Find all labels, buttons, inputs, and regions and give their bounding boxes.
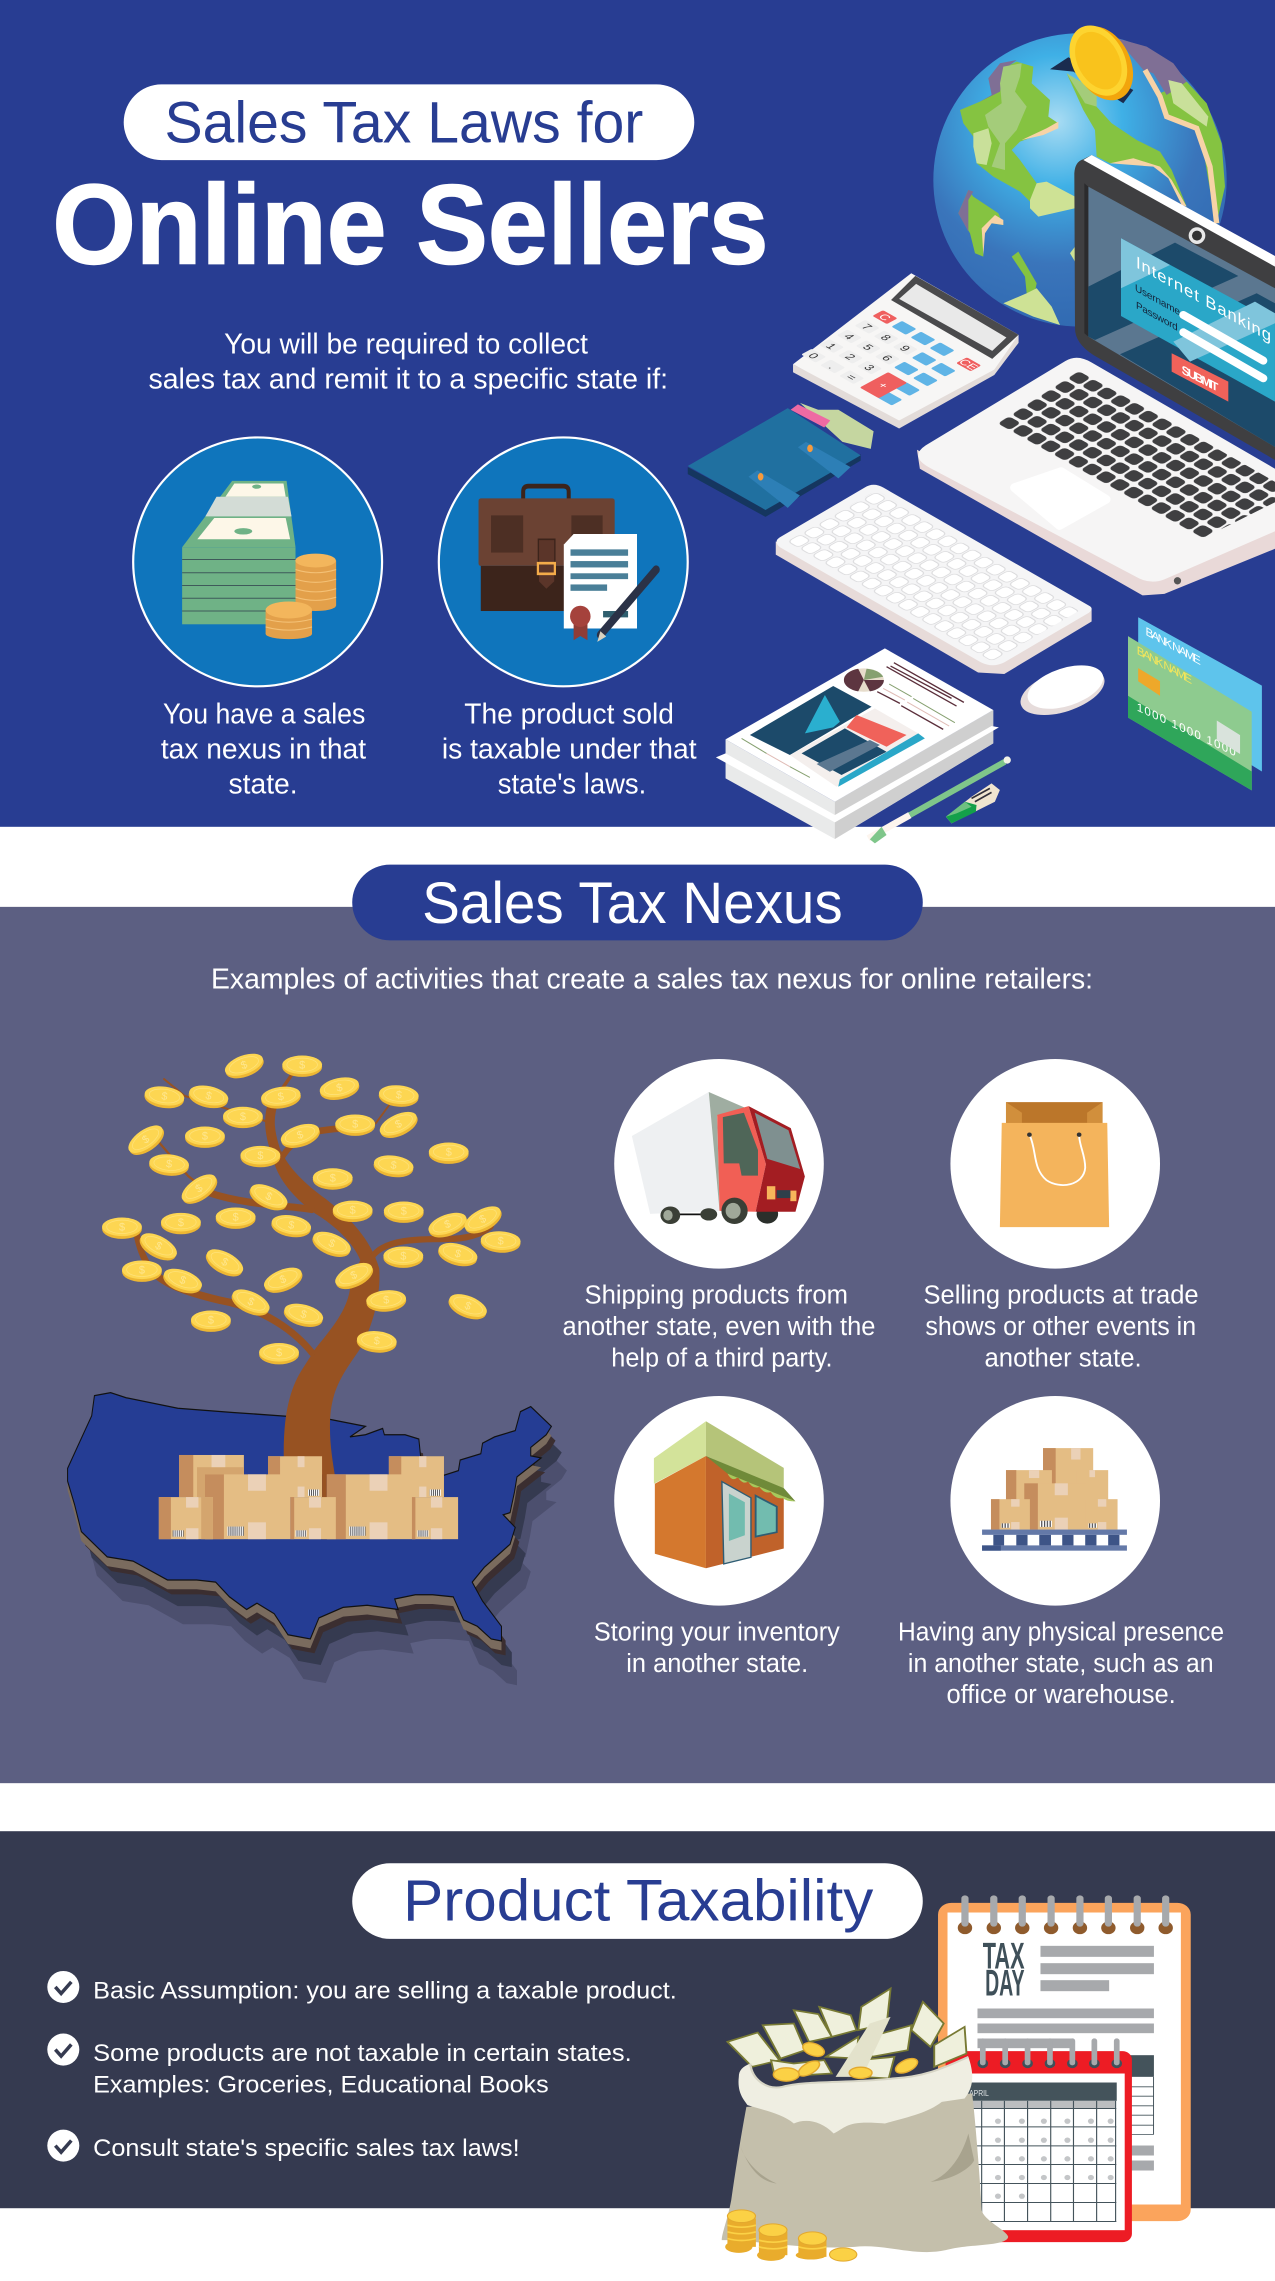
text: shipping: help of a third party.	[611, 1344, 833, 1372]
subtitle: Examples of activities that create a sales tax nexus for online retailers:	[211, 963, 1093, 995]
text: inventory	[594, 1619, 840, 1678]
bullet: consult laws: Consult state's specific sales tax laws!	[93, 2135, 520, 2162]
heading pill: Product Taxability	[352, 1863, 923, 1939]
heading pill: Sales Tax Nexus	[352, 865, 923, 940]
bullet: non-taxable products	[47, 2034, 632, 2098]
icon: tax day notepad	[938, 1899, 1191, 2221]
map of the United States	[68, 1393, 567, 1685]
icon: money sack	[722, 1989, 1008, 2261]
icon: calendar: APRIL	[969, 2089, 989, 2098]
text: taxable condition: state's laws.	[498, 768, 646, 800]
icon: keyboard	[776, 485, 1092, 674]
tree trunk and branches	[136, 1073, 491, 1479]
text: inventory: Storing your inventory	[594, 1619, 840, 1647]
laptop screen: Username	[1135, 282, 1180, 318]
heading pill: Product Taxability: Product Taxability	[403, 1869, 873, 1934]
text: trade shows: another state.	[984, 1344, 1142, 1372]
icon: calculator	[793, 273, 1019, 429]
icon: bank cards	[1128, 617, 1262, 790]
icon: bank cards: 1000 1000 1000	[1137, 700, 1236, 759]
circle: money	[133, 437, 382, 686]
intro text	[148, 329, 668, 396]
text: nexus condition: You have a sales	[163, 698, 365, 730]
icon: laptop	[917, 155, 1275, 595]
text: physical presence: office or warehouse.	[946, 1681, 1176, 1709]
panel: header	[0, 0, 1275, 843]
heading pill: Sales Tax Nexus: Sales Tax Nexus	[422, 871, 843, 936]
title pill: Sales Tax Laws for	[164, 91, 643, 156]
text: nexus condition: state.	[229, 768, 298, 800]
text: taxable condition: The product sold	[464, 698, 674, 730]
illustration: tax day notepad, calendar and money sack	[722, 1899, 1191, 2261]
text: trade shows: shows or other events in	[925, 1313, 1196, 1341]
panel: product taxability	[0, 1831, 1275, 2261]
text: nexus condition	[161, 698, 366, 800]
bullet: non-taxable products: Some products are not taxable in certain states.	[93, 2040, 632, 2067]
text: physical presence: in another state, such as an	[908, 1650, 1214, 1678]
icon: tax day notepad: DAY	[985, 1962, 1025, 2004]
activity: shopping bag	[950, 1059, 1160, 1269]
bullet: non-taxable products: Examples: Groceries, Educational Books	[93, 2071, 549, 2098]
text: taxable condition	[442, 698, 697, 800]
icon: mouse	[1015, 657, 1110, 724]
laptop screen: Internet Banking	[1136, 252, 1271, 346]
activity: warehouse pallet	[950, 1396, 1160, 1606]
coin stacks	[725, 2210, 857, 2261]
icon: tax day notepad: TAX	[983, 1935, 1025, 1977]
heading: Online Sellers: Online Sellers	[52, 161, 768, 288]
circle: briefcase and contract	[439, 437, 688, 686]
icon: wallet	[688, 403, 874, 517]
intro text: sales tax and remit it to a specific state if:	[148, 364, 668, 396]
laptop screen: SUBMIT	[1182, 362, 1219, 395]
laptop screen: Password	[1136, 300, 1178, 334]
activity: storefront	[614, 1396, 824, 1606]
icon: bank cards: BANK NAME	[1145, 624, 1201, 668]
text: nexus condition: tax nexus in that	[161, 733, 366, 765]
text: physical presence: Having any physical presence	[898, 1619, 1224, 1647]
gold coins	[102, 1049, 521, 1364]
panel: sales tax nexus	[0, 865, 1275, 1783]
text: shipping: another state, even with the	[563, 1313, 875, 1341]
icon: documents and phone	[716, 648, 999, 839]
icon: pencil and eraser	[868, 756, 1011, 843]
illustration: money tree on US map	[68, 1049, 567, 1685]
illustration: online banking desk	[688, 15, 1275, 843]
icon: globe with coin	[933, 15, 1227, 327]
bullet: basic assumption: Basic Assumption: you are selling a taxable product.	[93, 1978, 677, 2005]
activity: shipping truck	[614, 1059, 824, 1269]
cardboard boxes	[159, 1455, 458, 1539]
text: taxable condition: is taxable under that	[442, 733, 697, 765]
text: shipping	[563, 1282, 875, 1372]
text: trade shows: Selling products at trade	[924, 1282, 1199, 1310]
intro text: You will be required to collect	[224, 329, 588, 361]
text: trade shows	[924, 1282, 1199, 1372]
text: shipping: Shipping products from	[585, 1282, 848, 1310]
icon: calendar	[946, 2041, 1132, 2242]
text: inventory: in another state.	[626, 1650, 808, 1678]
laptop screen	[1074, 155, 1275, 460]
icon: bank cards: BANK NAME	[1137, 643, 1192, 687]
text: physical presence	[898, 1619, 1224, 1709]
